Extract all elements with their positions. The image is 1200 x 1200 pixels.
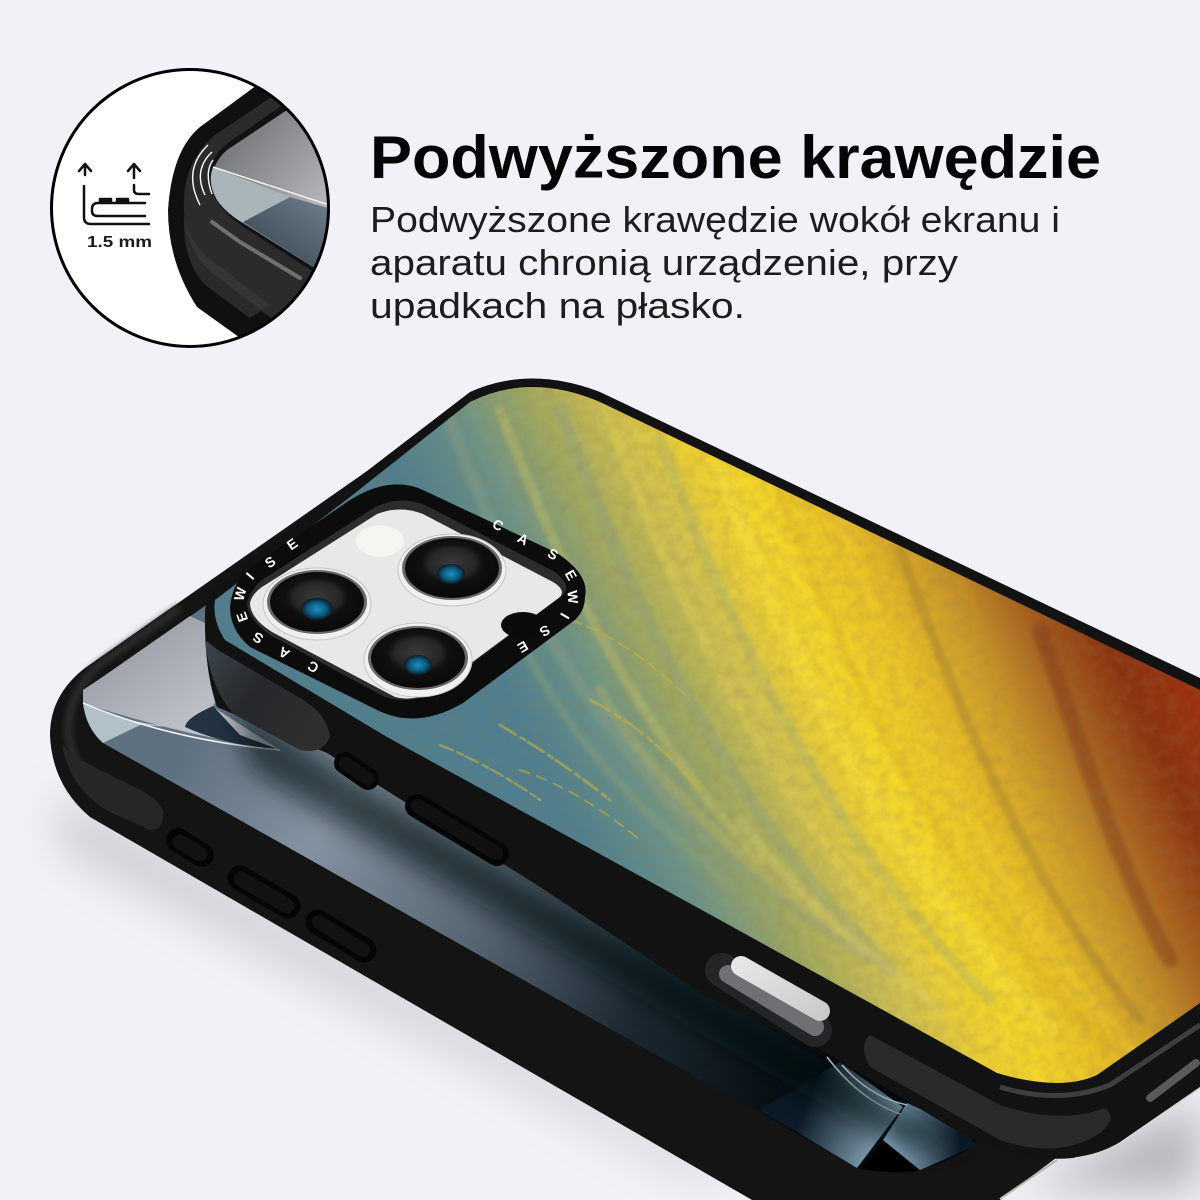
CASEWISE ring lettering: C <box>305 658 321 676</box>
wallpaper highlight curve <box>83 703 280 750</box>
CASEWISE ring lettering: A <box>515 530 531 548</box>
front phone volume button <box>417 806 497 854</box>
description text: upadkach na płasko. <box>370 285 745 326</box>
CASEWISE ring lettering: S <box>250 629 266 647</box>
front phone action button <box>345 763 368 779</box>
wallpaper grey panel <box>83 616 280 750</box>
CASEWISE ring lettering: W <box>231 585 250 602</box>
wallpaper blue panels at bottom <box>760 1057 975 1172</box>
CASEWISE ring lettering: I <box>557 610 573 622</box>
frame inner lighter band <box>68 608 180 778</box>
paint grain <box>200 370 1200 1090</box>
front phone: back of case <box>200 370 1200 1159</box>
camera island <box>230 484 586 719</box>
CASEWISE ring lettering: S <box>537 622 553 640</box>
painted artwork back <box>200 370 1200 1090</box>
back phone volume buttons <box>240 878 364 950</box>
CASEWISE ring lettering: E <box>515 638 531 656</box>
CASEWISE ring lettering: I <box>243 569 257 583</box>
inset phone corner <box>168 87 327 336</box>
CASEWISE ring lettering: S <box>545 545 561 563</box>
CASEWISE ring lettering: E <box>233 610 251 624</box>
soft shadow cast onto back phone <box>230 700 960 1150</box>
drop shadows <box>60 790 1200 1190</box>
lens left <box>263 568 371 640</box>
raised edge arcs <box>193 145 213 205</box>
CASEWISE ring lettering: C <box>490 516 506 534</box>
lens bottom <box>364 623 472 697</box>
corner bumper at lower right <box>864 1035 1110 1149</box>
microphone hole <box>501 612 545 638</box>
back phone: screen side <box>50 462 1060 1200</box>
icon: 1.5 mm raised edge diagram <box>79 164 149 224</box>
yellow paint flecks <box>440 620 700 840</box>
back phone lower bumper <box>62 745 163 830</box>
rim highlight <box>1000 1025 1200 1096</box>
CASEWISE ring lettering: E <box>284 535 300 553</box>
lens top right <box>398 534 506 606</box>
back phone screen <box>83 540 1000 1172</box>
back phone case frame <box>50 462 1060 1200</box>
description text: aparatu chronią urządzenie, przy <box>370 242 958 283</box>
front phone silver side button <box>722 966 820 1030</box>
description text <box>370 199 1060 326</box>
measurement label: 1.5 mm <box>87 234 152 251</box>
wallpaper dark shape <box>185 706 280 750</box>
CASEWISE ring lettering <box>231 516 582 676</box>
CASEWISE ring lettering: E <box>562 567 580 583</box>
description text: Podwyższone krawędzie wokół ekranu i <box>370 199 1060 240</box>
speaker strip <box>1150 1063 1196 1098</box>
island inner wall <box>247 500 566 700</box>
front phone case frame <box>205 378 1200 1159</box>
CASEWISE ring lettering: W <box>564 590 582 605</box>
title: Podwyższone krawędzie <box>370 124 1101 191</box>
wallpaper pale panel <box>83 703 185 743</box>
lower rim line <box>1075 1088 1200 1158</box>
CASEWISE ring lettering: S <box>262 553 278 571</box>
island window <box>250 510 562 699</box>
island black ring <box>230 484 586 719</box>
CASEWISE ring lettering: A <box>276 644 292 662</box>
front phone lower-left bumper <box>205 640 330 751</box>
back phone power button <box>178 840 202 855</box>
brush streaks <box>450 410 1170 1060</box>
inset circle outline <box>52 70 328 346</box>
inset detail circle: raised edge close-up <box>51 60 340 347</box>
flash <box>356 526 404 556</box>
